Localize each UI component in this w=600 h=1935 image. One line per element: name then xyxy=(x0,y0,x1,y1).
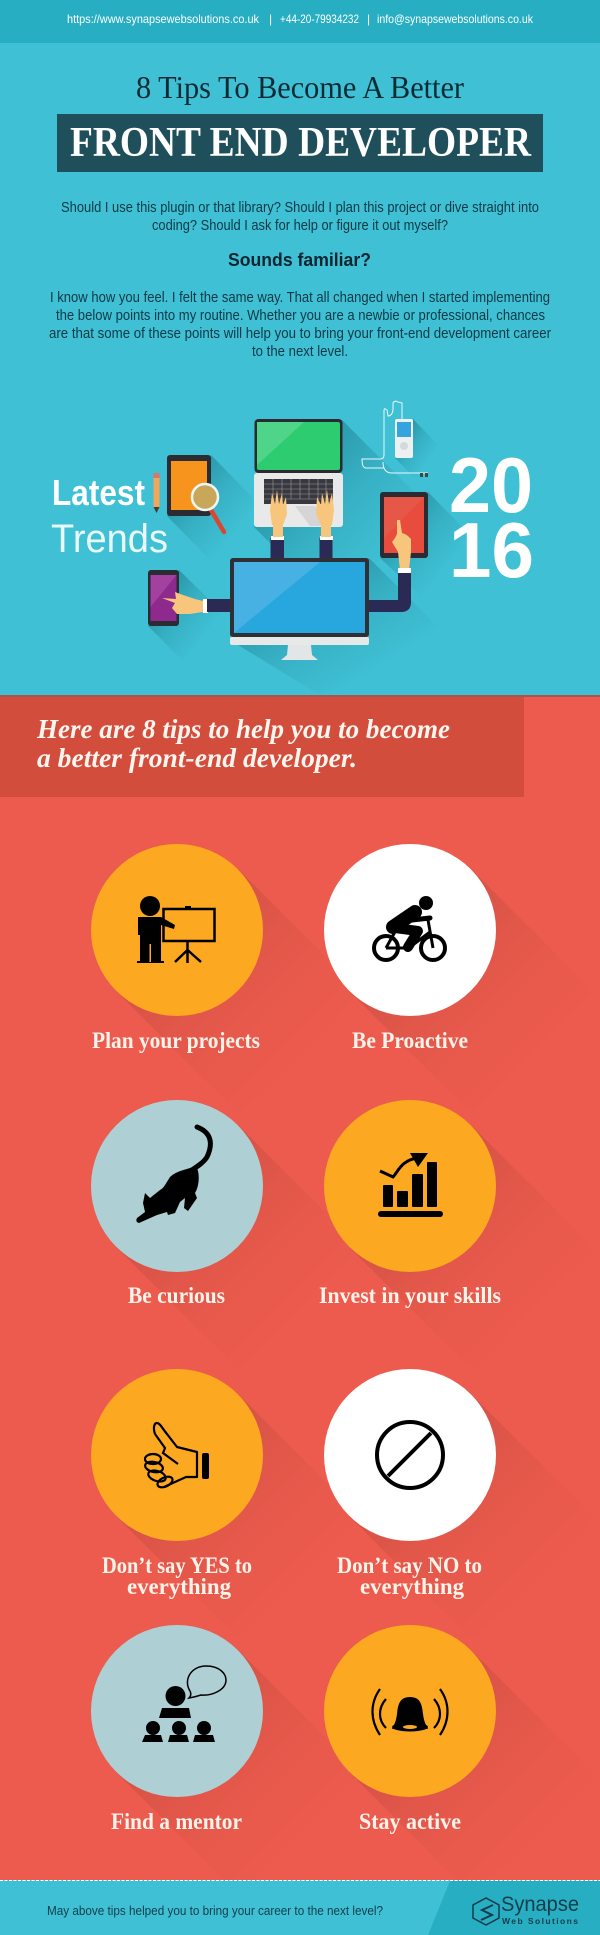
tip: don't say no xyxy=(324,1369,496,1599)
logo: synapse web solutions: Synapse xyxy=(501,1893,579,1916)
year 2016: 20 xyxy=(449,441,533,529)
label: be proactive: Be Proactive xyxy=(352,1028,468,1053)
year 2016 xyxy=(449,441,534,594)
contact bar: https://www.synapsewebsolutions.co.uk xyxy=(67,12,260,26)
title banner: FRONT END DEVELOPER xyxy=(70,120,532,166)
icon: hands on keyboard xyxy=(270,490,334,559)
contact bar xyxy=(0,0,600,43)
tip: be proactive xyxy=(324,844,496,1053)
sounds familiar heading: Sounds familiar? xyxy=(228,250,371,270)
panel: tips intro banner: Here are 8 tips to help you to become xyxy=(36,714,450,744)
second paragraph xyxy=(49,290,551,360)
icon: purple phone with hand xyxy=(148,570,208,626)
label: don't say no to everything: Don’t say NO to xyxy=(337,1553,482,1578)
circle shadows xyxy=(116,869,600,1902)
second paragraph: I know how you feel. I felt the same way. That all changed when I started implementing xyxy=(50,290,550,306)
icon: cyclist xyxy=(374,896,445,960)
tip: don't say yes xyxy=(91,1369,263,1599)
intro paragraph: Should I use this plugin or that library? Should I plan this project or dive straight into xyxy=(61,200,539,216)
icon: mp3 player with earphones xyxy=(362,401,428,477)
tip: plan your projects xyxy=(91,844,263,1053)
logo: synapse web solutions: Web Solutions xyxy=(502,1916,578,1926)
icon: desktop monitor xyxy=(230,558,369,660)
label: invest in your skills: Invest in your skills xyxy=(319,1283,501,1308)
icon: ringing bell xyxy=(372,1689,448,1735)
icon: laptop xyxy=(254,419,343,527)
icon: growth chart xyxy=(378,1153,443,1217)
label: latest trends xyxy=(51,472,168,561)
second paragraph: to the next level. xyxy=(252,344,348,360)
contact bar: | xyxy=(269,12,272,26)
contact bar: | xyxy=(367,12,370,26)
label: stay active: Stay active xyxy=(359,1809,461,1834)
label: don't say yes to everything xyxy=(102,1553,252,1599)
year 2016: 16 xyxy=(449,506,534,594)
logo: synapse web solutions xyxy=(473,1893,579,1926)
icon: orange tablet with magnifier xyxy=(167,455,224,532)
panel: red tips section xyxy=(0,695,600,1880)
label: be curious: Be curious xyxy=(128,1283,225,1308)
intro paragraph xyxy=(61,200,539,234)
label: plan your projects: Plan your projects xyxy=(92,1028,260,1053)
footer question: May above tips helped you to bring your career to the next level? xyxy=(47,1904,383,1918)
label: don't say no to everything: everything xyxy=(360,1574,464,1599)
label: don't say yes to everything: everything xyxy=(127,1574,231,1599)
label: latest trends: Trends xyxy=(51,517,168,561)
icon: cat xyxy=(136,1127,210,1223)
label: don't say no to everything xyxy=(337,1553,482,1599)
icon: mentor and group xyxy=(142,1666,226,1742)
contact bar: +44-20-79934232 xyxy=(280,12,359,26)
long shadows xyxy=(148,419,470,695)
title line: 8 Tips To Become A Better xyxy=(136,69,464,105)
label: don't say yes to everything: Don’t say YES to xyxy=(102,1553,252,1578)
panel: tips intro banner xyxy=(0,697,524,797)
label: find a mentor: Find a mentor xyxy=(111,1809,242,1834)
panel: footer xyxy=(0,1880,600,1935)
icon: pencil xyxy=(154,473,160,513)
icon: thumbs up xyxy=(144,1423,209,1489)
panel: teal header background xyxy=(0,0,600,696)
icon: red tablet with hand xyxy=(380,492,428,570)
hero illustration xyxy=(51,401,534,695)
tip: invest in your skills xyxy=(319,1100,501,1308)
panel: tips intro banner: a better front-end developer. xyxy=(37,743,357,773)
tip: stay active xyxy=(324,1625,496,1834)
contact bar: info@synapsewebsolutions.co.uk xyxy=(377,12,534,26)
icon: no sign xyxy=(377,1422,443,1488)
icon: arms from monitor xyxy=(207,568,411,612)
icon: presenter and board xyxy=(137,896,214,963)
tip: be curious xyxy=(91,1100,263,1308)
intro paragraph: coding? Should I ask for help or figure it out myself? xyxy=(152,218,448,234)
second paragraph: the below points into my routine. Whether you are a newbie or professional, chances xyxy=(56,308,545,324)
tip: find a mentor xyxy=(91,1625,263,1834)
label: latest trends: Latest xyxy=(52,472,145,513)
second paragraph: are that some of these points will help you to bring your front-end development career xyxy=(49,326,551,342)
